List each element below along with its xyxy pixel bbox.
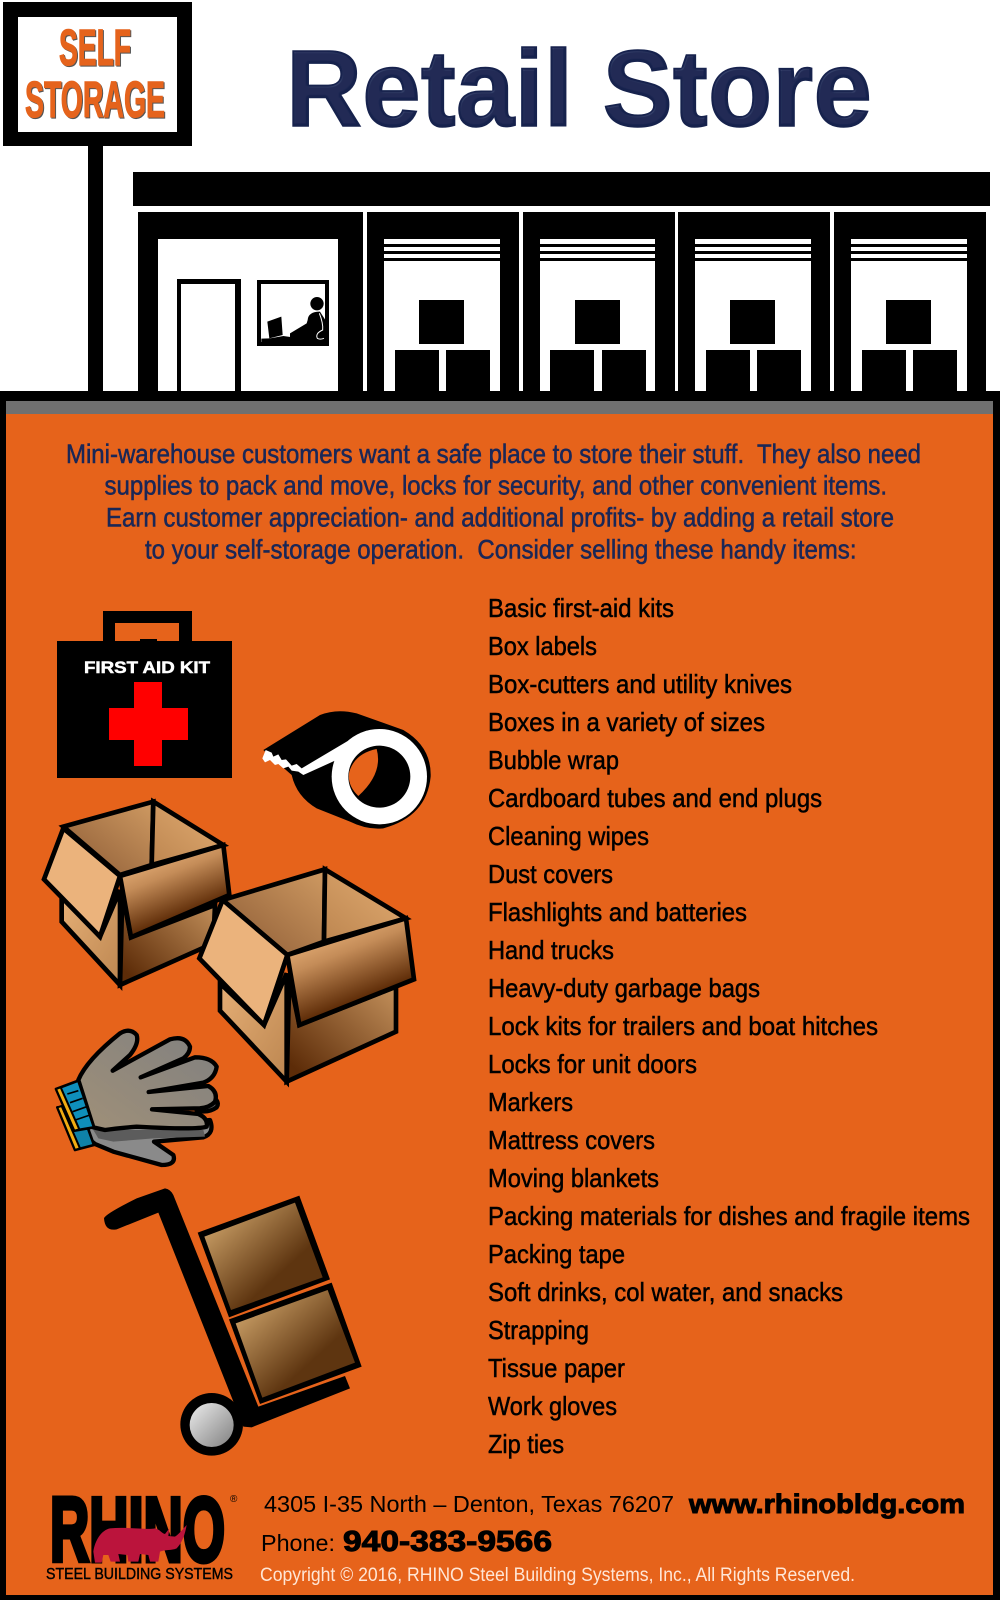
copyright: Copyright © 2016, RHINO Steel Building Systems, Inc., All Rights Reserved. (260, 1565, 855, 1586)
storage unit 1 (367, 212, 519, 394)
product list: Work gloves (488, 1393, 617, 1421)
icon: rhino silhouette (93, 1525, 187, 1563)
product list: Heavy-duty garbage bags (488, 975, 760, 1003)
product list: Lock kits for trailers and boat hitches (488, 1013, 878, 1041)
product list: Packing materials for dishes and fragile items (488, 1203, 970, 1231)
icon: open cardboard box, left (44, 802, 229, 985)
title: Retail Store (286, 28, 872, 150)
sign: self storage: SELF (59, 19, 131, 76)
logo: RHINO Steel Building Systems: STEEL BUILDING SYSTEMS (46, 1566, 233, 1583)
product list: Bubble wrap (488, 747, 619, 775)
contact: address: 4305 I-35 North – Denton, Texas 76207 (264, 1491, 674, 1517)
icon: work gloves (56, 1031, 218, 1165)
product list: Cardboard tubes and end plugs (488, 785, 822, 813)
intro paragraph: Earn customer appreciation- and additional profits- by adding a retail store (106, 502, 894, 532)
product list: Flashlights and batteries (488, 899, 747, 927)
panel: orange content area (0, 391, 1000, 1600)
logo: RHINO Steel Building Systems: RHINO (50, 1480, 225, 1581)
icon: hand truck with boxes (104, 1188, 362, 1456)
intro paragraph: supplies to pack and move, locks for security, and other convenient items. (104, 470, 887, 500)
product list: Dust covers (488, 861, 613, 889)
sign: self storage: SELF (60, 20, 132, 77)
product list: Soft drinks, col water, and snacks (488, 1279, 843, 1307)
contact: website: www.rhinobldg.com (688, 1489, 965, 1519)
icon: first aid kit: FIRST AID KIT (84, 659, 210, 677)
product list: Zip ties (488, 1431, 564, 1459)
product list: Markers (488, 1089, 573, 1117)
intro paragraph: to your self-storage operation. Consider selling these handy items: (145, 534, 856, 564)
product list (488, 595, 970, 1459)
product list: Tissue paper (488, 1355, 625, 1383)
product list: Cleaning wipes (488, 823, 649, 851)
intro paragraph (66, 439, 921, 564)
product list: Boxes in a variety of sizes (488, 709, 765, 737)
logo: RHINO Steel Building Systems: ® (230, 1494, 238, 1505)
icon: open cardboard box, right (199, 869, 414, 1082)
storage unit 2 (523, 212, 675, 394)
icon: packing tape roll (262, 711, 431, 829)
contact: phone label: Phone: (261, 1530, 335, 1556)
sign: self storage (3, 2, 192, 395)
contact: phone number: 940-383-9566 (343, 1526, 552, 1558)
product list: Hand trucks (488, 937, 614, 965)
icon: first aid kit (57, 611, 232, 778)
product list: Strapping (488, 1317, 589, 1345)
product list: Mattress covers (488, 1127, 655, 1155)
product list: Moving blankets (488, 1165, 659, 1193)
product list: Box labels (488, 633, 597, 661)
sign: self storage: STORAGE (25, 71, 165, 128)
sign: self storage: STORAGE (26, 72, 166, 129)
product list: Basic first-aid kits (488, 595, 674, 623)
intro paragraph: Mini-warehouse customers want a safe place to store their stuff. They also need (66, 439, 921, 469)
product list: Locks for unit doors (488, 1051, 697, 1079)
office unit with door and window (138, 212, 363, 394)
product list: Packing tape (488, 1241, 625, 1269)
storage unit 3 (678, 212, 830, 394)
logo: RHINO Steel Building Systems (46, 1480, 238, 1583)
building: storage facility (133, 172, 990, 394)
storage unit 4 (834, 212, 986, 394)
roof (133, 172, 990, 206)
product list: Box-cutters and utility knives (488, 671, 792, 699)
